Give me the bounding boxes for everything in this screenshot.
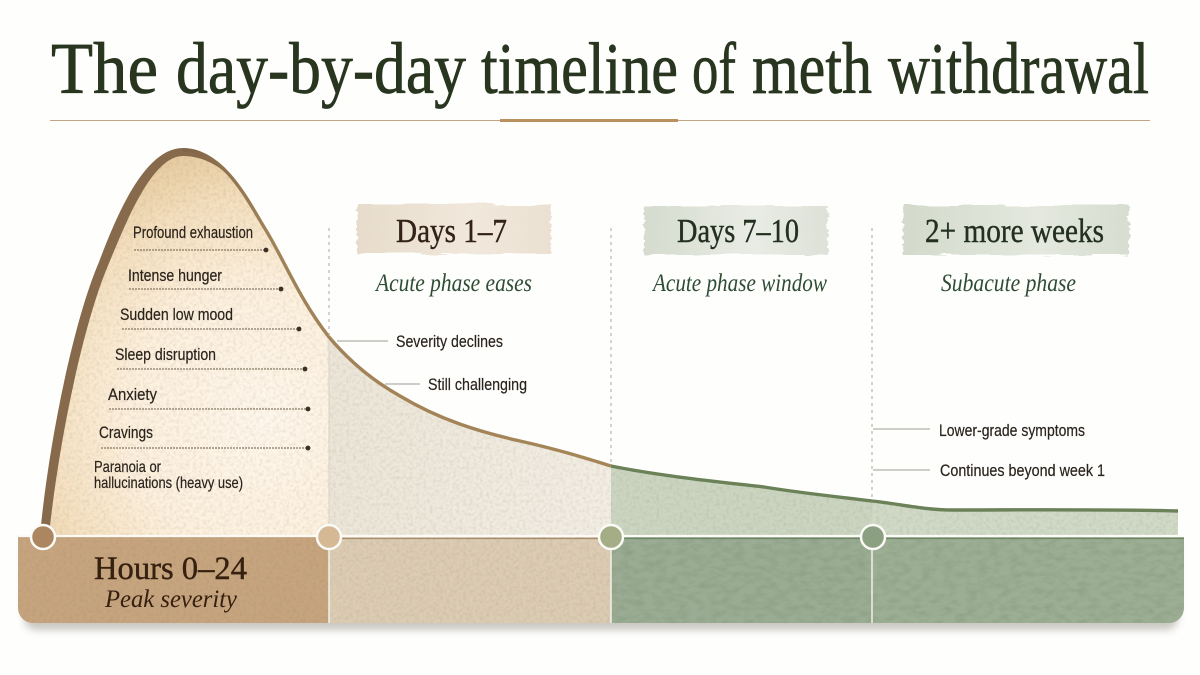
symptom: cravings: Cravings <box>99 423 153 442</box>
curve line: falling edge <box>183 150 611 466</box>
area: peak severity hours 0-24 <box>41 149 329 535</box>
symptom: paranoia or hallucinations <box>94 459 243 492</box>
band segment: hours 0-24 <box>18 537 329 623</box>
symptom: sudden low mood: Sudden low mood <box>120 305 233 324</box>
title: meth <box>752 28 872 109</box>
marker: day 10 <box>861 525 885 549</box>
timeline markers <box>31 525 885 549</box>
symptom: intense hunger <box>128 266 283 291</box>
phase header: days 7-10: Days 7–10 <box>677 213 799 250</box>
timeline band <box>18 536 1184 630</box>
symptom: sleep disruption <box>115 345 307 371</box>
phase header: days 7-10 <box>644 205 828 297</box>
symptom: anxiety <box>108 385 310 411</box>
title: of <box>692 28 736 109</box>
callout: still challenging: Still challenging <box>428 375 527 394</box>
curve line: green tail <box>611 466 1178 511</box>
phase header: days 1-7: Acute phase eases <box>374 270 532 297</box>
callout: severity declines: Severity declines <box>396 332 503 351</box>
area: days 1-7 <box>329 337 611 535</box>
band label: peak severity: Peak severity <box>104 586 238 613</box>
title: The <box>51 28 158 109</box>
marker: day 1 <box>317 525 341 549</box>
marker: day 7 <box>599 525 623 549</box>
callout: continues beyond week 1: Continues beyond week 1 <box>940 461 1105 480</box>
symptom: paranoia or hallucinations: hallucinations (heavy use) <box>94 475 243 492</box>
marker: hour 0 <box>31 525 55 549</box>
phase header: 2+ more weeks: Subacute phase <box>941 270 1076 297</box>
symptom list <box>94 223 310 492</box>
curve line: rising edge <box>40 148 235 535</box>
band segment: days 7-10 <box>611 537 872 623</box>
phase header: 2+ more weeks <box>903 205 1129 297</box>
symptom: paranoia or hallucinations: Paranoia or <box>94 459 162 476</box>
band label: hours 0-24: Hours 0–24 <box>94 551 247 587</box>
phase header: 2+ more weeks: 2+ more weeks <box>925 213 1104 250</box>
symptom: intense hunger: Intense hunger <box>128 266 222 285</box>
area: days 7-10 <box>611 466 872 535</box>
symptom: profound exhaustion <box>133 223 268 252</box>
callout: lower-grade symptoms: Lower-grade symptoms <box>939 421 1085 440</box>
title rule <box>50 119 1150 122</box>
phase header: days 1-7: Days 1–7 <box>396 213 507 250</box>
phase header: days 1-7 <box>357 204 551 297</box>
area: 2+ more weeks <box>872 501 1178 535</box>
title: day-by-day <box>176 28 466 109</box>
symptom: sudden low mood <box>120 305 301 331</box>
symptom: cravings <box>99 423 310 450</box>
band segment: days 1-7 <box>329 537 611 623</box>
phase dividers <box>329 228 872 500</box>
band segment: 2+ more weeks <box>872 537 1184 623</box>
severity curve chart <box>40 148 1178 535</box>
symptom: anxiety: Anxiety <box>108 385 157 404</box>
title: timeline <box>481 28 678 109</box>
symptom: sleep disruption: Sleep disruption <box>115 345 216 364</box>
phase header: days 7-10: Acute phase window <box>651 270 827 297</box>
symptom: profound exhaustion: Profound exhaustion <box>133 223 253 242</box>
